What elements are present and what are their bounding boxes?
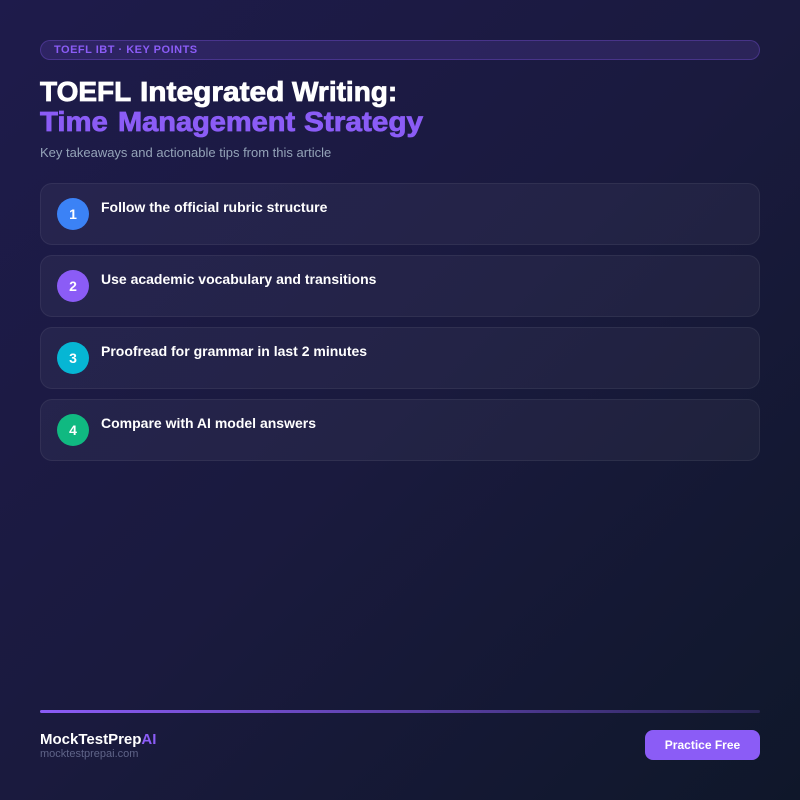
- badge: category label: [40, 40, 760, 60]
- panel: key point 3: [40, 327, 760, 389]
- text: key point 3: Proofread for grammar in last 2 minutes: [101, 343, 367, 359]
- text: key point 1: Follow the official rubric structure: [101, 199, 327, 215]
- title: TOEFL: [40, 76, 131, 107]
- text: key point 2: Use academic vocabulary and transitions: [101, 271, 376, 287]
- title: Time: [40, 106, 108, 137]
- icon: number 4: 4: [69, 422, 77, 438]
- icon: number 4: [57, 414, 89, 446]
- icon: number 2: [57, 270, 89, 302]
- title: Strategy: [304, 106, 423, 137]
- panel: key point 2: [40, 255, 760, 317]
- title: Writing:: [292, 76, 397, 107]
- title: [40, 76, 424, 138]
- panel: key point 1: [40, 183, 760, 245]
- title: Management: [118, 106, 295, 137]
- icon: number 1: [57, 198, 89, 230]
- badge: category label: TOEFL IBT · KEY POINTS: [54, 44, 198, 56]
- title: Integrated: [140, 76, 284, 107]
- icon: number 1: 1: [69, 206, 77, 222]
- brand url: mocktestprepai.com: [40, 748, 138, 760]
- panel: key point 4: [40, 399, 760, 461]
- button: practice free: [645, 730, 760, 760]
- subtitle: Key takeaways and actionable tips from this article: [40, 145, 331, 160]
- icon: number 3: [57, 342, 89, 374]
- text: key point 4: Compare with AI model answers: [101, 415, 316, 431]
- footer divider bar: [40, 710, 760, 713]
- icon: number 2: 2: [69, 278, 77, 294]
- icon: number 3: 3: [69, 350, 77, 366]
- button: practice free: Practice Free: [665, 738, 740, 752]
- brand name: MockTestPrepAI: [40, 731, 156, 748]
